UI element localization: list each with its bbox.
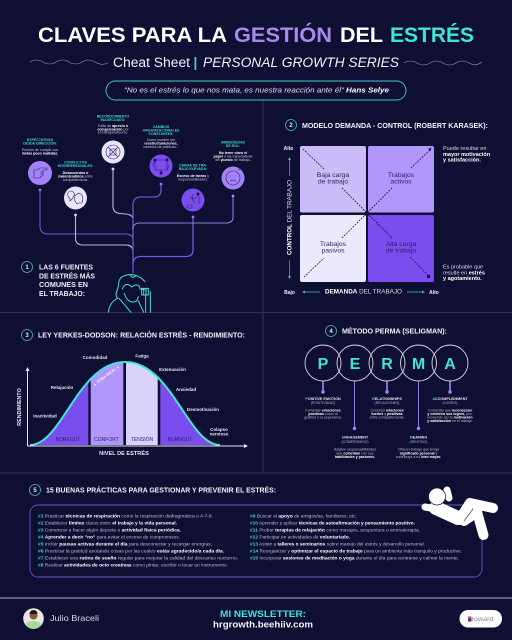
list: practices 9-15: #11 Probar terapias de relajación como masajes, acupuntura o aromaterapia.: [250, 528, 420, 532]
label: carga: Exceso de tareas y: [177, 174, 209, 178]
label: ambigüedad: papel o las expectativas: [214, 154, 253, 158]
label: expectativas: EXPECTATIVAS: [27, 138, 54, 142]
section number 4: 4: [329, 329, 333, 335]
list: practices 1-8: [38, 514, 238, 568]
note: agotamiento: y agotamiento.: [443, 276, 482, 282]
note: motivación: Puede resultar en: [443, 146, 486, 152]
note: agotamiento: Es probable que: [443, 264, 483, 270]
text: meaning: significado personal y: [400, 452, 438, 456]
axis: demanda del trabajo: Alto: [429, 290, 439, 296]
heading: las 6 fuentes: LAS 6 FUENTES: [39, 262, 93, 272]
bell curve chart: BOREOUT: [56, 437, 80, 443]
heading: perma: MÉTODO PERMA (SELIGMAN):: [342, 326, 447, 336]
text: accomplishment: [427, 397, 473, 423]
newsletter: MI NEWSLETTER:: [220, 609, 306, 619]
list: practices 1-8: #7 Establecer una rutina de sueño regular para mejorar la calidad del descanso nocturno.: [38, 556, 238, 560]
text: meaning: MEANING: [410, 436, 427, 440]
bell curve chart: nervioso: [210, 432, 229, 436]
note: motivación: mayor motivación: [443, 152, 491, 158]
text: positive emotion: (POSITIVIDAD): [311, 401, 335, 405]
text: accomplishment: moviendo así la motivación: [427, 416, 473, 420]
bell curve chart: [17, 354, 248, 457]
list: practices 9-15: #13 Asistir a talleres o seminarios sobre manejo del estrés y desarrollo personal.: [250, 542, 425, 546]
bell curve chart: Colapso: [210, 427, 228, 432]
icon: carga: [182, 188, 204, 212]
text: relationships: Construir relaciones: [370, 408, 404, 412]
label: expectativas: [22, 138, 58, 156]
section number 2: [286, 120, 296, 130]
label: expectativas: metas poco realistas.: [22, 152, 58, 156]
matrix: Trabajos: [320, 241, 347, 248]
label: cambios: cambios de políticas...: [143, 145, 179, 149]
matrix: de trabajo: [318, 178, 348, 186]
section number 1: 1: [25, 265, 29, 271]
title: ESTRÉS: [390, 24, 474, 47]
subtitle: [30, 55, 482, 70]
section number 5: [30, 484, 40, 496]
label: cambios: ORGANIZACIONALES: [143, 128, 180, 132]
label: reconocimiento: el trabajo/esfuerzo.: [98, 131, 128, 135]
icon: stressed person: [108, 275, 150, 312]
title: GESTIÓN: [234, 23, 332, 47]
label: conflictos: Desacuerdos o: [63, 171, 89, 175]
newsletter: [213, 609, 313, 630]
matrix: pasivos: [321, 248, 345, 254]
label: ambigüedad: No tener claro el: [219, 151, 247, 155]
list: practices 1-8: #1 Practicar técnicas de respiración como la respiración diafragmática o 4-7-8.: [38, 514, 213, 518]
text: meaning: [396, 436, 441, 459]
panel: buenas prácticas: [30, 484, 493, 577]
note: agotamiento: resulte en estrés: [443, 270, 485, 276]
icon: reclining person: [425, 488, 493, 535]
list: practices 1-8: #5 Incluir pausas activas durante el día para desconectar y recargar energías.: [38, 542, 212, 546]
branching lines: [39, 168, 234, 273]
label: conflictos: INTERPERSONALES:: [58, 164, 93, 168]
quote pill: [106, 81, 406, 100]
logo: groward: [460, 610, 502, 628]
label: cambios: reestructuraciones,: [144, 142, 178, 146]
text: accomplishment: y satisfacción en el trabajo.: [427, 419, 473, 423]
text: positive emotion: POSITIVE EMOTION: [305, 397, 341, 401]
perma letters: M: [412, 356, 425, 373]
heading: las 6 fuentes: DE ESTRÉS MÁS: [39, 272, 95, 280]
label: reconocimiento: RECONOCIMIENTO: [97, 115, 129, 119]
matrix: [300, 146, 434, 282]
bell curve chart: Inactividad: [33, 414, 57, 418]
perma letters: A: [444, 356, 456, 373]
bell curve chart: Desmotivación: [187, 407, 219, 412]
logo: groward: roward: [472, 617, 494, 623]
axis: control del trabajo: Alto: [284, 146, 293, 152]
note: motivación: [443, 146, 491, 164]
section number 5: 5: [33, 488, 37, 494]
quote pill: "No es el estrés lo que nos mata, es nuestra reacción ante él" Hans Selye: [124, 88, 389, 94]
text: meaning: contribuya a un bien mayor.: [396, 455, 441, 459]
note: motivación: y satisfacción.: [443, 158, 481, 164]
note: agotamiento: [443, 264, 485, 282]
text: accomplishment: ACCOMPLISHMENT: [432, 397, 468, 401]
perma circles: [305, 345, 468, 381]
text: relationships: [370, 397, 404, 420]
label: expectativas: DESDE DIRECCIÓN:: [23, 141, 57, 146]
perma stems: [321, 381, 452, 430]
perma letters: E: [350, 356, 361, 373]
label: cambios: [143, 125, 180, 149]
label: conflictos: malentendidos entre: [58, 174, 93, 178]
bell curve chart: TENSIÓN: [131, 436, 153, 443]
practices box: [30, 505, 482, 577]
matrix: activos: [390, 178, 412, 186]
list: practices 1-8: #3 Comenzar a hacer algún deporte o actividad física periódica.: [38, 528, 181, 532]
label: carga: BAJO ELEVADA:: [179, 167, 207, 171]
axis: demanda del trabajo: DEMANDA DEL TRABAJO: [325, 290, 402, 296]
label: ambigüedad: del puesto de trabajo.: [215, 158, 251, 162]
panel: footer: [0, 598, 512, 630]
bell curve chart: Extenuación: [159, 367, 186, 372]
text: meaning: (SENTIDO): [410, 440, 427, 444]
list: practices 1-8: #8 Realizar actividades de ocio creativas como pintar, escribir o tocar un instrumento.: [38, 562, 228, 568]
label: reconocimiento: compensación por: [97, 127, 129, 131]
section number 1: [22, 262, 32, 272]
axis: control del trabajo: [284, 146, 294, 279]
heading: 15 buenas prácticas: 15 BUENAS PRÁCTICAS PARA GESTIONAR Y PREVENIR EL ESTRÉS:: [46, 486, 276, 494]
list: practices 1-8: #4 Aprender a decir "no" para evitar el exceso de compromisos.: [38, 534, 180, 540]
subtitle: |: [194, 55, 197, 70]
section number 4: [326, 326, 336, 336]
bell curve chart: CONFORT: [94, 437, 119, 443]
text: positive emotion: gratitud o la esperanza.: [304, 416, 342, 420]
label: conflictos: [58, 161, 93, 182]
matrix: de trabajo: [386, 248, 416, 254]
list: practices 9-15: #15 Incorporar sesiones de meditación o yoga durante el día para centrarse y calmar la mente.: [250, 556, 459, 560]
text: positive emotion: positivas como la: [308, 412, 338, 416]
heading: las 6 fuentes: EL TRABAJO:: [39, 289, 85, 298]
bell curve chart: Comodidad: [83, 355, 108, 360]
label: cambios: CONSTANTES:: [148, 132, 174, 136]
icon: conflictos: [64, 186, 87, 210]
axis: demanda del trabajo: Bajo: [284, 290, 295, 296]
text: engagement: que coincidan con sus: [336, 452, 374, 456]
avatar: [23, 608, 44, 629]
perma letters: R: [381, 356, 393, 373]
text: engagement: habilidades y pasiones.: [335, 455, 375, 459]
axis: control del trabajo: CONTROL DEL TRABAJO: [288, 180, 294, 255]
text: engagement: (COMPROMISO): [341, 440, 369, 444]
heading: las 6 fuentes: COMUNES EN: [39, 280, 88, 289]
panel: yerkes-dodson: [17, 330, 248, 457]
text: positive emotion: Fomentar emociones: [305, 408, 341, 412]
panel: método perma: [304, 326, 473, 459]
text: accomplishment: Comentar que reconozcan: [428, 408, 472, 412]
text: engagement: [334, 436, 376, 459]
label: reconocimiento: Falta de aprecio o: [98, 124, 129, 128]
text: meaning: Ofrecer trabajo que tenga: [398, 448, 439, 452]
text: relationships: fuertes y positivas: [371, 412, 403, 416]
icon: expectativas: [28, 161, 52, 185]
list: practices 9-15: #12 Participar en actividades de voluntariado.: [250, 534, 350, 540]
label: carga: CARGA DE TRA-: [179, 164, 208, 168]
icon: ambigüedad: [222, 166, 244, 190]
section number 3: 3: [25, 333, 29, 339]
bell curve chart: Fatiga: [135, 354, 149, 358]
list: practices 9-15: #9 Buscar el apoyo de amigos/as, familiares, etc.: [250, 514, 357, 518]
label: carga: responsabilidades.: [178, 178, 208, 182]
bell curve chart: Relajación: [51, 385, 74, 390]
text: relationships: (RELACIONES): [375, 401, 399, 405]
title: CLAVES PARA LA: [38, 24, 227, 47]
label: expectativas: Presión de cumplir con: [22, 148, 58, 152]
panel: fuentes de estrés: [22, 115, 253, 312]
text: relationships: entre compañeros/as.: [370, 416, 404, 420]
label: cambios: Como pueden ser: [147, 138, 176, 142]
label: ambigüedad: [214, 141, 253, 162]
icon: cambios: [150, 154, 172, 178]
label: carga: [177, 164, 209, 182]
matrix: Baja carga: [317, 172, 349, 179]
list: practices 9-15: #14 Reorganizar y optimizar el espacio de trabajo para un ambiente más tranquilo y productivo.: [250, 548, 462, 554]
heading: yerkes-dodson: LEY YERKES-DODSON: RELACIÓN ESTRÉS - RENDIMIENTO:: [38, 330, 245, 340]
panel: modelo demanda-control: [284, 120, 491, 296]
list: practices 1-8: #6 Practicar la gratitud anotando cosas por las cuales estás agradecido/a cada día.: [38, 548, 224, 554]
bell curve chart: ▲ ZONA IDEAL ▲: [92, 364, 121, 387]
section number 3: [22, 330, 32, 340]
label: conflictos: compañeros/as.: [63, 178, 88, 182]
text: relationships: RELATIONSHIPS: [372, 397, 402, 401]
newsletter: hrgrowth.beehiiv.com: [213, 620, 313, 630]
matrix: Alta carga: [386, 241, 417, 248]
heading: las 6 fuentes: [39, 262, 95, 298]
icon: reconocimiento: [102, 140, 124, 164]
perma letters: P: [318, 356, 329, 373]
label: reconocimiento: INADECUADO:: [101, 118, 125, 122]
list: practices 1-8: #2 Establecer límites claros entre el trabajo y la vida personal.: [38, 520, 177, 526]
perma letters: [318, 356, 456, 373]
label: ambigüedad: DE ROL:: [226, 144, 240, 148]
matrix: Trabajos: [388, 172, 415, 179]
label: conflictos: CONFLICTOS: [64, 161, 88, 165]
title: [38, 23, 474, 47]
bell curve chart: RENDIMIENTO: [17, 388, 23, 426]
heading: modelo: MODELO DEMANDA - CONTROL (ROBERT KARASEK):: [302, 121, 488, 130]
list: practices 9-15: #10 Aprender y aplicar técnicas de autoafirmación y pensamiento positivo.: [250, 520, 415, 526]
text: positive emotion: [304, 397, 342, 420]
axis: demanda del trabajo: [284, 290, 439, 296]
bell curve chart: Ansiedad: [176, 387, 196, 392]
label: cambios: CAMBIOS: [153, 125, 170, 129]
bell curve chart: BURNOUT: [168, 437, 192, 443]
subtitle: Cheat Sheet: [113, 55, 190, 70]
text: engagement: Asignar responsabilidades: [334, 448, 376, 452]
title: DEL: [340, 24, 383, 47]
list: practices 9-15: [250, 514, 462, 560]
author name: Julio Braceli: [50, 613, 99, 623]
text: accomplishment: y celebren sus logros, pro-: [427, 412, 473, 416]
label: reconocimiento: [97, 115, 129, 135]
text: engagement: ENGAGEMENT: [342, 436, 369, 440]
section number 2: 2: [289, 123, 293, 129]
subtitle: PERSONAL GROWTH SERIES: [203, 55, 399, 70]
bell curve chart: NIVEL DE ESTRÉS: [99, 449, 149, 457]
text: accomplishment: (LOGRO): [443, 401, 457, 405]
label: ambigüedad: AMBIGÜEDAD: [221, 141, 246, 145]
